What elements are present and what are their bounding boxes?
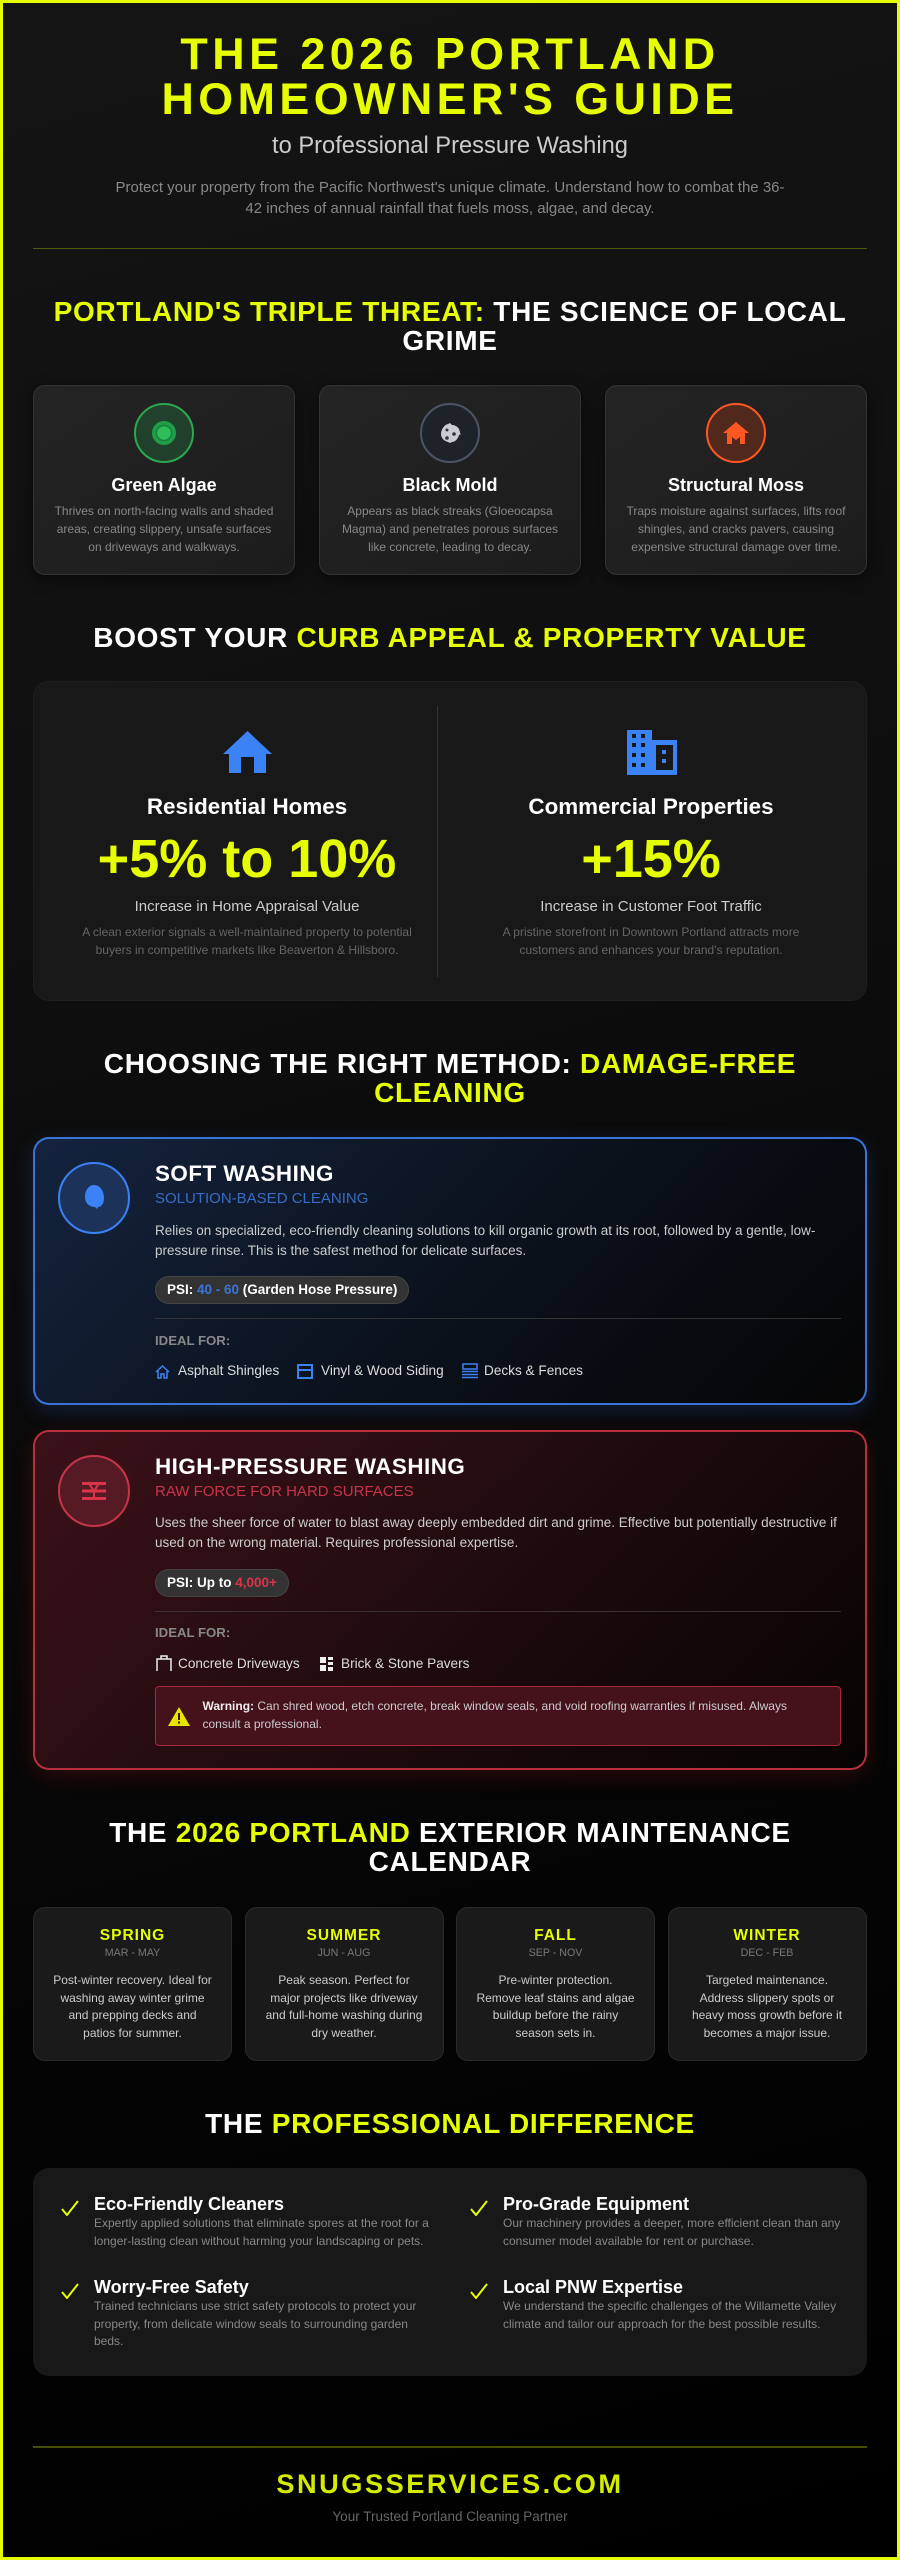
- label: ideal for: IDEAL FOR:: [155, 1333, 230, 1348]
- text: spring: patios for summer.: [83, 2026, 182, 2040]
- text: winter: Address slippery spots or: [700, 1991, 834, 2005]
- text: residential: [82, 925, 412, 957]
- label: winter: WINTER: [733, 1927, 801, 1944]
- text: spring: Post-winter recovery. Ideal for: [53, 1973, 212, 1987]
- text: warning: Warning: Can shred wood, etch concrete, break window seals, and void roofing warranties if misused. Always: [202, 1699, 787, 1713]
- text: structural moss: Traps moisture against surfaces, lifts roof: [626, 504, 845, 518]
- icon: droplet: [58, 1162, 130, 1234]
- text: green algae: [54, 504, 273, 554]
- item: local PNW expertise: Local PNW Expertise: [503, 2277, 683, 2297]
- callout: warning: [155, 1686, 841, 1746]
- text: spring: [53, 1973, 212, 2040]
- subheading: high-pressure washing: RAW FORCE FOR HARD SURFACES: [155, 1483, 414, 1500]
- months: summer: JUN - AUG: [318, 1947, 370, 1959]
- icon: pressure lines: [58, 1455, 130, 1527]
- heading: maintenance calendar: CALENDAR: [369, 1846, 531, 1877]
- text: structural moss: expensive structural damage over time.: [631, 540, 841, 554]
- text: black mold: [342, 504, 558, 554]
- text: winter: [692, 1973, 842, 2040]
- text: black mold: Magma) and penetrates porous surfaces: [342, 522, 558, 536]
- text: commercial: A pristine storefront in Downtown Portland attracts more: [503, 925, 799, 939]
- text: high-pressure washing: [155, 1515, 837, 1550]
- text: fall: season sets in.: [515, 2026, 596, 2040]
- text: spring: and prepping decks and: [68, 2008, 197, 2022]
- months: fall: SEP - NOV: [529, 1947, 582, 1959]
- label: commercial stat: Increase in Customer Foot Traffic: [540, 898, 762, 915]
- text: winter: becomes a major issue.: [704, 2026, 830, 2040]
- panel: professional difference: [33, 2168, 867, 2376]
- item: pro-grade equipment: consumer model available for rent or purchase.: [503, 2234, 754, 2248]
- stat: residential: +5% to 10%: [98, 829, 396, 889]
- item: local PNW expertise: [470, 2277, 836, 2331]
- text: commercial: customers and enhances your brand's reputation.: [519, 943, 783, 957]
- heading: maintenance calendar: [109, 1816, 791, 1877]
- panel: high-pressure washing: [33, 1430, 867, 1770]
- intro text: 42 inches of annual rainfall that fuels moss, algae, and decay.: [245, 200, 655, 217]
- item: pro-grade equipment: Pro-Grade Equipment: [503, 2194, 689, 2214]
- text: winter: heavy moss growth before it: [692, 2008, 842, 2022]
- heading: maintenance calendar: THE 2026 PORTLAND EXTERIOR MAINTENANCE: [109, 1816, 791, 1848]
- text: green algae: areas, creating slippery, unsafe surfaces: [57, 522, 271, 536]
- text: residential: buyers in competitive markets like Beaverton & Hillsboro.: [96, 943, 398, 957]
- icon: building: [627, 730, 677, 775]
- text: fall: buildup before the rainy: [493, 2008, 618, 2022]
- icon: green algae: [134, 403, 194, 463]
- heading: commercial: Commercial Properties: [528, 794, 774, 818]
- text: structural moss: shingles, and cracks pavers, causing: [638, 522, 834, 536]
- PSI badge: high-pressure: PSI: Up to 4,000+: [167, 1575, 277, 1590]
- heading: green algae: Green Algae: [111, 475, 217, 495]
- panel: green algae: [33, 385, 295, 575]
- heading: structural moss: Structural Moss: [668, 475, 804, 495]
- item: pro-grade equipment: Our machinery provides a deeper, more efficient clean than any: [503, 2216, 840, 2230]
- text: fall: Pre-winter protection.: [498, 1973, 613, 1987]
- text: high-pressure washing: used on the wrong material. Requires professional expertise.: [155, 1535, 518, 1550]
- item: worry-free safety: property, from delicate window seals to surrounding garden: [94, 2317, 408, 2331]
- panel: winter: [668, 1907, 866, 2061]
- text: summer: and full-home washing during: [266, 2008, 422, 2022]
- item: eco-friendly cleaners: [61, 2194, 429, 2248]
- panel: black mold: [319, 385, 581, 575]
- PSI badge: soft washing: [155, 1276, 409, 1304]
- text: fall: Remove leaf stains and algae: [476, 1991, 635, 2005]
- item: concrete driveways: Concrete Driveways: [178, 1656, 300, 1671]
- text: summer: Peak season. Perfect for: [278, 1973, 410, 1987]
- text: summer: major projects like driveway: [270, 1991, 418, 2005]
- label: fall: FALL: [534, 1927, 577, 1944]
- text: soft washing: pressure rinse. This is the safest method for delicate surfaces.: [155, 1243, 526, 1258]
- icon: house: [223, 731, 272, 773]
- text: soft washing: Relies on specialized, eco-friendly cleaning solutions to kill organic growth at its root, followed by a gentle, low-: [155, 1223, 815, 1238]
- icon: black mold: [420, 403, 480, 463]
- panel: property value: [33, 681, 867, 1001]
- heading: triple threat: GRIME: [402, 325, 498, 356]
- item: worry-free safety: Worry-Free Safety: [94, 2277, 249, 2297]
- label: summer: SUMMER: [307, 1927, 381, 1944]
- intro text: Protect your property from the Pacific Northwest's unique climate. Understand how to combat the 36-: [115, 179, 784, 196]
- text: structural moss: [626, 504, 846, 554]
- PSI badge: high-pressure: [155, 1569, 289, 1597]
- text: summer: dry weather.: [311, 2026, 377, 2040]
- text: green algae: Thrives on north-facing walls and shaded: [55, 504, 273, 518]
- heading: high-pressure washing: HIGH-PRESSURE WASHING: [155, 1454, 465, 1479]
- item: eco-friendly cleaners: Expertly applied solutions that eliminate spores at the root for a: [94, 2216, 429, 2230]
- heading: triple threat: PORTLAND'S TRIPLE THREAT: THE SCIENCE OF LOCAL: [54, 296, 846, 326]
- item: brick and stone pavers: Brick & Stone Pavers: [341, 1656, 469, 1671]
- months: winter: DEC - FEB: [741, 1947, 793, 1959]
- item: worry-free safety: Trained technicians use strict safety protocols to protect your: [94, 2299, 416, 2313]
- text: warning: consult a professional.: [202, 1717, 322, 1731]
- footer: website: SNUGSSERVICES.COM: [276, 2468, 624, 2499]
- PSI badge: soft washing: PSI: 40 - 60 (Garden Hose Pressure): [167, 1282, 397, 1297]
- title: [161, 28, 739, 124]
- heading: residential: Residential Homes: [147, 794, 347, 818]
- label: residential stat: Increase in Home Appraisal Value: [135, 898, 359, 915]
- text: summer: [266, 1973, 422, 2040]
- label: ideal for: IDEAL FOR:: [155, 1625, 230, 1640]
- item: pro-grade equipment: [470, 2194, 840, 2248]
- icon: structural moss: [706, 403, 766, 463]
- text: green algae: on driveways and walkways.: [88, 540, 240, 554]
- subtitle: to Professional Pressure Washing: [272, 133, 628, 159]
- heading: soft washing: SOFT WASHING: [155, 1161, 334, 1186]
- item: local PNW expertise: climate and tailor our approach for the best possible results.: [503, 2317, 821, 2331]
- text: black mold: like concrete, leading to decay.: [368, 540, 532, 554]
- item: worry-free safety: beds.: [94, 2334, 123, 2348]
- text: soft washing: [155, 1223, 815, 1258]
- item: local PNW expertise: We understand the specific challenges of the Willamette Valley: [503, 2299, 836, 2313]
- panel: fall: [456, 1907, 655, 2061]
- item: eco-friendly cleaners: longer-lasting clean without harming your landscaping or pets.: [94, 2234, 424, 2248]
- text: commercial: [502, 925, 799, 957]
- heading: triple threat: [54, 296, 846, 356]
- heading: right method: CLEANING: [374, 1077, 526, 1108]
- heading: right method: CHOOSING THE RIGHT METHOD: DAMAGE-FREE: [104, 1048, 796, 1078]
- panel: soft washing: [33, 1137, 867, 1405]
- title: HOMEOWNER'S GUIDE: [161, 74, 739, 124]
- item: worry-free safety: [61, 2277, 416, 2348]
- months: spring: MAR - MAY: [105, 1947, 160, 1959]
- stat: commercial: +15%: [581, 829, 721, 889]
- heading: black mold: Black Mold: [402, 475, 498, 495]
- text: spring: washing away winter grime: [60, 1991, 205, 2005]
- heading: right method: [104, 1048, 796, 1108]
- heading: professional difference: THE PROFESSIONAL DIFFERENCE: [205, 2108, 695, 2138]
- item: asphalt shingles: Asphalt Shingles: [178, 1363, 279, 1378]
- item: decks and fences: Decks & Fences: [484, 1363, 583, 1378]
- item: eco-friendly cleaners: Eco-Friendly Cleaners: [94, 2194, 284, 2214]
- footer: tagline: Your Trusted Portland Cleaning Partner: [332, 2509, 568, 2524]
- item: vinyl and wood siding: Vinyl & Wood Siding: [321, 1363, 444, 1378]
- icon: warning triangle: [168, 1707, 190, 1726]
- text: fall: [476, 1973, 635, 2040]
- panel: spring: [33, 1907, 232, 2061]
- text: black mold: Appears as black streaks (Gloeocapsa: [347, 504, 553, 518]
- text: residential: A clean exterior signals a well-maintained property to potential: [82, 925, 412, 939]
- heading: curb appeal: BOOST YOUR CURB APPEAL & PROPERTY VALUE: [93, 622, 807, 652]
- label: spring: SPRING: [100, 1927, 165, 1944]
- panel: summer: [244, 1907, 444, 2061]
- intro text: [115, 179, 784, 217]
- text: high-pressure washing: Uses the sheer force of water to blast away deeply embedded dirt and grime. Effective but potentially destructive if: [155, 1515, 837, 1530]
- text: winter: Targeted maintenance.: [706, 1973, 828, 1987]
- title: THE 2026 PORTLAND: [180, 28, 720, 78]
- panel: structural moss: [605, 385, 867, 575]
- subheading: soft washing: SOLUTION-BASED CLEANING: [155, 1190, 368, 1207]
- text: warning: [202, 1699, 787, 1731]
